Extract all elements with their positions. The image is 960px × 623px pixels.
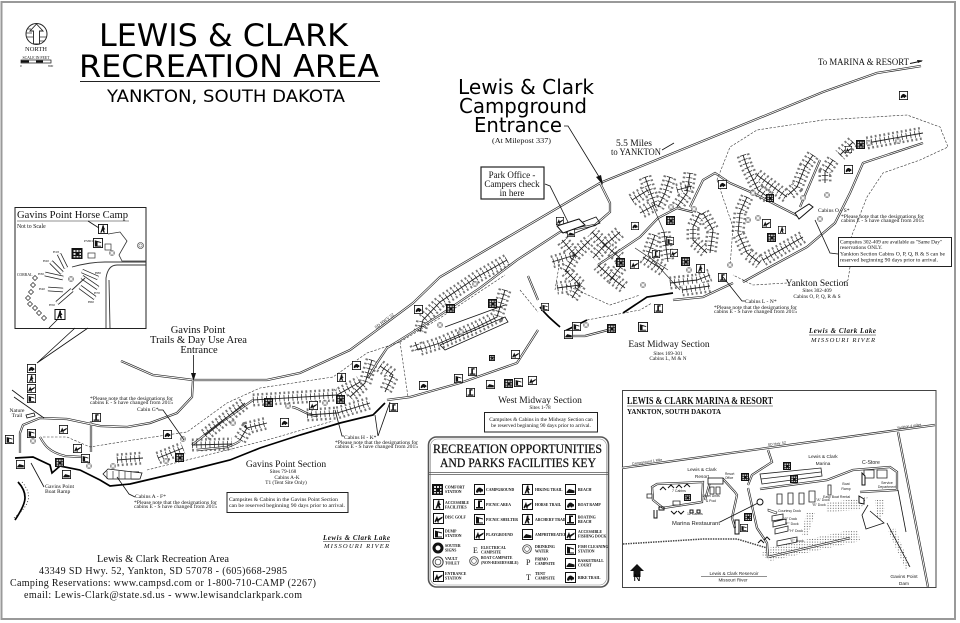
icon: north arrow and scale: SCALE IN FEET [22,56,50,60]
marina labels: Lewis & Clark [687,467,717,473]
marina labels: SD Hwy. 52 [768,440,786,447]
key column 3: CAMPSITE [535,562,556,566]
panel: Gavins Point Horse Camp [15,208,146,328]
marina labels: "G" Dock [783,517,797,521]
key column 1: STATION [445,576,462,580]
marina labels [632,423,922,587]
note: cabins O-S: cabins E - S have changed from 2015 [841,217,924,224]
icons on main map [5,91,908,479]
label: Lewis and Clark Lake, west: Lewis & Clark Lake [322,534,390,542]
marina labels: Yankton 4 miles [897,423,922,430]
key column 4: FISH CLEANING [578,545,608,549]
note: cabins O-S: Cabins O - S* [818,208,850,214]
marina heading: LEWIS & CLARK MARINA & RESORT [627,396,773,407]
panel: Gavins Point Horse Camp: H80 [95,271,101,275]
marina labels: Easy Boat Rental [823,495,850,499]
label: Lewis and Clark Lake, west: MISSOURI RIVER [323,543,389,550]
note: cabins L-N: *Please note that the designations for [714,304,797,311]
callout: Midway reservations: Campsites & Cabins in the Midway Section can [489,417,593,423]
marina labels: Service [881,481,893,485]
marina labels: & Pool [706,499,716,503]
campground entrance heading: Lewis & Clark [458,75,594,99]
label: Gavins Point trails entrance [150,325,247,381]
label: boat ramp: Gavins Point [45,484,75,490]
label: boat ramp [31,463,75,495]
heading: East Midway Section: East Midway Section [628,340,710,350]
key column 4: FISHING DOCK [578,534,606,538]
icon: north arrow and scale: 0 [20,64,22,68]
marina labels: Marina Restaurant [672,521,721,527]
key column 4 [566,484,608,582]
label: Gavins Point trails entrance: Gavins Point [171,325,225,336]
marina labels: "E" Dock [790,539,804,543]
heading: East Midway Section: Cabins L, M & N [649,356,687,362]
key column 1: SIGNS [445,548,456,552]
key column 1: SOUTER [445,544,461,548]
callout: Gavins Point reservations: Campsites & Cabins in the Gavins Point Section [229,497,338,503]
note: cabins L-N: Cabins L - N* [745,299,777,305]
note: cabin G: *Please note that the designations for [90,395,173,402]
note: cabins H-K: *Please note that the designations for [335,439,418,446]
contact information: Camping Reservations: www.campsd.com or 1-800-710-CAMP (2267) [10,578,316,589]
callout: park office: in here [500,188,524,198]
key column 3 [522,484,567,582]
callout: park office: Campers check [484,179,540,189]
heading: West Midway Section: Sites 1-78 [529,405,551,411]
callout: Yankton reservations: Yankton Section Cabins O, P, Q, R & S can be [840,252,946,258]
marina labels: Department [878,485,896,489]
label: nature trail: Nature [10,408,25,414]
key column 3: TENT [535,572,546,576]
marina labels: Gavins Point [890,574,918,580]
key column 3: HIKING TRAIL [535,488,563,492]
panel: Gavins Point Horse Camp: Not to Scale [17,224,46,230]
heading: East Midway Section: Sites 169-301 [653,351,683,357]
heading: Gavins Point Section: Cabins A-K [274,475,300,481]
label: 5.5 miles to Yankton: to YANKTON [611,148,661,158]
callout: Yankton reservations: reservations ONLY. [840,245,882,251]
key column 4: BASKETBALL [578,559,604,563]
callout: Yankton reservations: reserved beginning 90 days prior to arrival. [840,258,938,264]
contact information [10,554,316,601]
marina labels: Lewis & Clark [808,454,838,460]
arrow: entrance leader [564,126,603,185]
campground entrance heading: Campground [459,94,587,118]
marina labels: Lewis & Clark Reservoir [709,571,759,576]
key column 2: E [473,546,478,555]
marina labels: 7 Cabins [672,489,686,493]
key column 3: DRINKING [535,545,555,549]
label: to marina and resort: To MARINA & RESORT [818,57,909,67]
callout: Midway reservations [484,412,598,432]
icon: north arrow and scale: NORTH [25,46,47,53]
label: Lewis and Clark Lake, east: Lewis & Clark Lake [808,327,876,335]
key column 4: BIKE TRAIL [578,576,601,580]
marina labels: Ramp [841,487,851,491]
panel: Gavins Point Horse Camp: H18 [53,250,59,254]
note: cabins H-K: Cabins H - K* [344,435,377,441]
note: cabins H-K: cabins E - S have changed from 2015 [335,443,418,450]
key column 4: BOAT RAMP [578,503,601,507]
key column 1: ACCESSIBLE [445,501,470,505]
key column 4: BEACH [578,520,592,524]
marina roads [622,425,935,587]
marina labels: "H" Dock [789,529,803,533]
title [79,18,380,107]
key column 1: TOILET [445,562,460,566]
key heading: RECREATION OPPORTUNITIES [433,442,602,456]
marina heading [627,396,773,416]
key column 2: PICNIC AREA [486,503,511,507]
panel: recreation and facilities key [428,437,608,587]
label: Gavins Point trails entrance: Trails & Day Use Area [150,335,247,346]
campground entrance heading: (At Milepost 337) [492,137,552,145]
label: nature trail [10,390,44,419]
key column 3: T [526,573,531,582]
marina labels: Motel Units [702,494,720,498]
key column 1 [432,484,470,582]
key column 3: ARCHERY TRAIL [535,518,567,522]
contact information: Lewis & Clark Recreation Area [97,554,230,565]
note: cabins O-S [815,208,924,254]
panel: Gavins Point Horse Camp: H70 [94,291,100,295]
marina labels: C-Store [862,460,880,466]
key column 1: STATION [445,534,462,538]
key column 1: ENTRANCE [445,572,467,576]
label: 5.5 miles to Yankton: 5.5 Miles [616,139,652,149]
heading: Gavins Point Section: Sites 79-168 [270,469,297,475]
callout: Gavins Point reservations [227,492,348,512]
icon: north arrow and scale: 800 [48,64,54,68]
panel: Gavins Point Horse Camp: CORRAL [17,273,33,277]
key column 2: (NON-RESERVABLE) [481,561,519,565]
campground entrance heading: Entrance [474,113,562,137]
title: LEWIS & CLARK [99,18,349,54]
key column 2: CAMPSITE [481,550,502,554]
key column 1: FACILITIES [445,506,467,510]
note: cabin G: cabins E - S have changed from 2015 [90,399,173,406]
note: cabin G [90,395,184,440]
marina labels: Resort [725,472,735,476]
heading: Gavins Point Section: Gavins Point Section [246,460,326,470]
marina labels: Boat [842,482,850,486]
panel: Gavins Point Horse Camp: H40 [39,287,45,291]
note: cabins A-F: cabins E - S have changed from 2015 [134,503,217,510]
marina labels: Courtesy Dock [778,509,801,513]
label: Lewis and Clark Lake, east: MISSOURI RIVER [810,337,875,344]
heading: Yankton Section: Cabins O, P, Q, R & S [793,294,841,300]
label: boat ramp: Boat Ramp [45,489,71,495]
key column 4: BEACH [578,488,592,492]
callout: Gavins Point reservations: can be reserved beginning 90 days prior to arrival. [229,503,345,509]
panel: Lewis and Clark Marina and Resort [622,390,936,588]
contact information: email: Lewis-Clark@state.sd.us - www.lewisandclarkpark.com [24,590,302,601]
icon: marina north arrow [630,564,644,584]
note: cabins L-N [714,277,797,315]
marina heading: YANKTON, SOUTH DAKOTA [627,408,721,416]
panel: Gavins Point Horse Camp: H20 [43,259,49,263]
note: cabins O-S: *Please note that the designations for [841,213,924,220]
campground entrance heading [458,75,594,145]
key heading: AND PARKS FACILITIES KEY [440,456,596,470]
label: 5.5 miles to Yankton [611,139,674,158]
label: Lewis and Clark Lake, east [808,327,876,344]
callout: park office [481,167,568,222]
heading: West Midway Section [498,396,582,411]
note: cabins H-K [335,402,418,450]
marina labels: Dam [899,581,909,587]
marina labels: Marina [816,461,831,467]
key column 2: PICNIC SHELTER [486,518,518,522]
marina labels: "A" Dock [816,498,830,502]
panel: Gavins Point Horse Camp: H60 [88,300,94,304]
panel: Gavins Point Horse Camp: Gavins Point Horse Camp [17,210,128,221]
marina labels: Missouri River [718,578,748,582]
callout: Yankton reservations [838,238,952,266]
key column 2 [470,484,519,565]
key column 4: BOATING [578,516,596,520]
marina labels: "F" Dock [785,522,799,526]
marina stipple shoreline [623,497,910,570]
key column 1: DISC GOLF [445,516,466,520]
contact information: 43349 SD Hwy. 52, Yankton, SD 57078 - (605)668-2985 [39,566,287,577]
note: cabins A-F: *Please note that the designations for [134,499,217,506]
key column 4: ACCESSIBLE [578,530,603,534]
icon: marina north arrow: N [633,573,641,584]
key column 4: STATION [578,550,595,554]
label: Lewis and Clark Lake, west [322,534,390,550]
key column 2: BOAT CAMPSITE [481,556,513,560]
key column 4: COURT [578,564,592,568]
heading: Gavins Point Section [246,460,326,486]
callout wedge from horse camp [37,328,88,363]
heading: East Midway Section [628,340,710,362]
panel: Gavins Point Horse Camp: PS801 [84,239,93,243]
key column 3: WATER [535,550,549,554]
note: cabins A-F [117,477,217,510]
heading: West Midway Section: West Midway Section [498,396,582,406]
callout: park office: Park Office - [489,170,535,180]
key column 3: PRIMO [535,558,548,562]
heading: Gavins Point Section: T1 (Tent Site Only) [265,479,307,486]
callout: Midway reservations: be reserved beginning 90 days prior to arrival. [491,423,591,429]
key column 3: HORSE TRAIL [535,503,562,507]
label: SD Hwy 52: SD HWY 52 [374,312,395,330]
key column 2: PLAYGROUND [486,533,513,537]
heading: Yankton Section: Sites 302-409 [802,288,832,294]
panel: Gavins Point Horse Camp: H50 [49,303,55,307]
key column 3: CAMPSITE [535,576,556,580]
note: cabin G: Cabin G* [137,407,159,413]
key column 1: STATION [445,490,462,494]
marina labels: 12 Cabins [687,512,703,516]
marina labels: Resort [695,474,710,480]
icon: north arrow and scale [20,24,54,68]
key column 3: AMPHITHEATER [535,533,567,537]
marina labels: Office [725,476,733,480]
note: cabins L-N: cabins E - S have changed from 2015 [714,308,797,315]
key heading [429,442,608,474]
key column 1: COMFORT [445,486,465,490]
key column 2: CAMPGROUND [486,488,515,492]
callout: Yankton reservations: Campsites 302-409 are available as "Same Day" [840,240,942,246]
title: RECREATION AREA [79,49,379,85]
key column 1: DUMP [445,530,457,534]
marina buildings and docks [647,462,887,546]
key column 3: P [526,558,531,567]
key column 2: ELECTRICAL [481,546,507,550]
note: cabins A-F: Cabins A - F* [135,494,166,500]
label: Gavins Point trails entrance: Entrance [180,345,218,356]
main map: roads and shoreline [14,66,948,520]
heading: Yankton Section [786,279,849,300]
title: YANKTON, SOUTH DAKOTA [106,87,345,107]
key column 1: VAULT [445,557,458,561]
label: nature trail: Trail [12,413,23,419]
panel: Gavins Point Horse Camp: H30 [38,272,44,276]
heading: Yankton Section: Yankton Section [786,279,849,289]
marina labels: "B" Dock [812,503,826,507]
marina labels: Campground 1 Mile [632,458,662,466]
